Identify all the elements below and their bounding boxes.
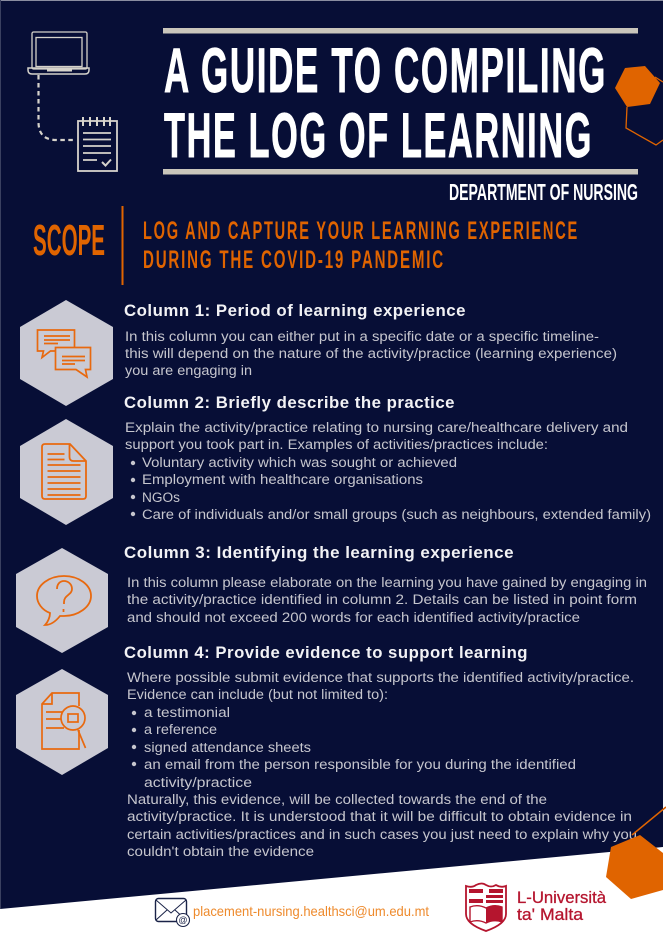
title block (163, 28, 638, 174)
icon: document in hexagon (20, 419, 113, 525)
column 4 text: a testimonial (144, 705, 230, 721)
text: SCOPE (33, 216, 105, 265)
column 4 text (127, 670, 637, 860)
column 2 text: Voluntary activity which was sought or achieved (142, 455, 457, 471)
column 4 text: certain activities/practices and in such cases you just need to explain why you (127, 827, 637, 843)
icon: chat bubbles in hexagon (20, 300, 113, 406)
column 1 text: this will depend on the nature of the activity/practice (learning experience) (125, 346, 617, 362)
column 2 text (125, 420, 651, 523)
icon: envelope with at sign (156, 898, 190, 926)
column 4 text: an email from the person responsible for you during the identified (144, 757, 576, 773)
icon: laptop connected to checklist (28, 32, 117, 171)
column 4 text: activity/practice. It is understood that it will be difficult to obtain evidence in (127, 809, 632, 825)
column 2 text: Employment with healthcare organisations (142, 472, 423, 488)
column 4 heading: Column 4: Provide evidence to support learning (124, 644, 528, 662)
column 1 text: In this column you can either put in a specific date or a specific timeline- (125, 329, 599, 345)
scope statement: DURING THE COVID-19 PANDEMIC (143, 246, 445, 274)
column 1 text: you are engaging in (125, 363, 252, 379)
column 2 text: Care of individuals and/or small groups (such as neighbours, extended family) (142, 507, 651, 523)
column 2 text: support you took part in. Examples of activities/practices include: (125, 437, 548, 453)
column 2 text: Explain the activity/practice relating to nursing care/healthcare delivery and (125, 420, 628, 436)
icon: envelope with at sign: @ (178, 915, 188, 925)
column 2 heading: Column 2: Briefly describe the practice (124, 394, 455, 412)
university logo (466, 884, 607, 931)
decorative hexagon bottom right (606, 807, 666, 899)
decorative hexagon top right (615, 66, 663, 145)
university logo: ta' Malta (517, 905, 584, 924)
contact email: placement-nursing.healthsci@um.edu.mt (193, 903, 429, 919)
icon: document with magnifier in hexagon (16, 669, 108, 775)
column 1 heading: Column 1: Period of learning experience (124, 302, 466, 320)
column 3 text: and should not exceed 200 words for each identified activity/practice (127, 610, 580, 626)
column 4 text: Evidence can include (but not limited to): (127, 687, 388, 703)
column 4 text: Where possible submit evidence that supports the identified activity/practice. (127, 670, 634, 686)
scope statement (143, 217, 579, 274)
column 4 text: a reference (144, 722, 217, 738)
column 4 text: activity/practice (144, 775, 252, 791)
column 4 text: Naturally, this evidence, will be collected towards the end of the (127, 792, 547, 808)
university logo: L-Università (517, 888, 607, 907)
column 4 text: signed attendance sheets (144, 740, 311, 756)
column 3 text: the activity/practice identified in column 2. Details can be listed in point form (127, 592, 637, 608)
column 2 text: NGOs (142, 490, 180, 506)
column 4 text: couldn't obtain the evidence (127, 844, 314, 860)
column 3 text: In this column please elaborate on the learning you have gained by engaging in (127, 575, 647, 591)
column 3 text (127, 575, 647, 626)
column 3 heading: Column 3: Identifying the learning experience (124, 544, 514, 562)
icon: question speech bubble in hexagon (16, 548, 108, 653)
column 1 text (125, 329, 617, 379)
